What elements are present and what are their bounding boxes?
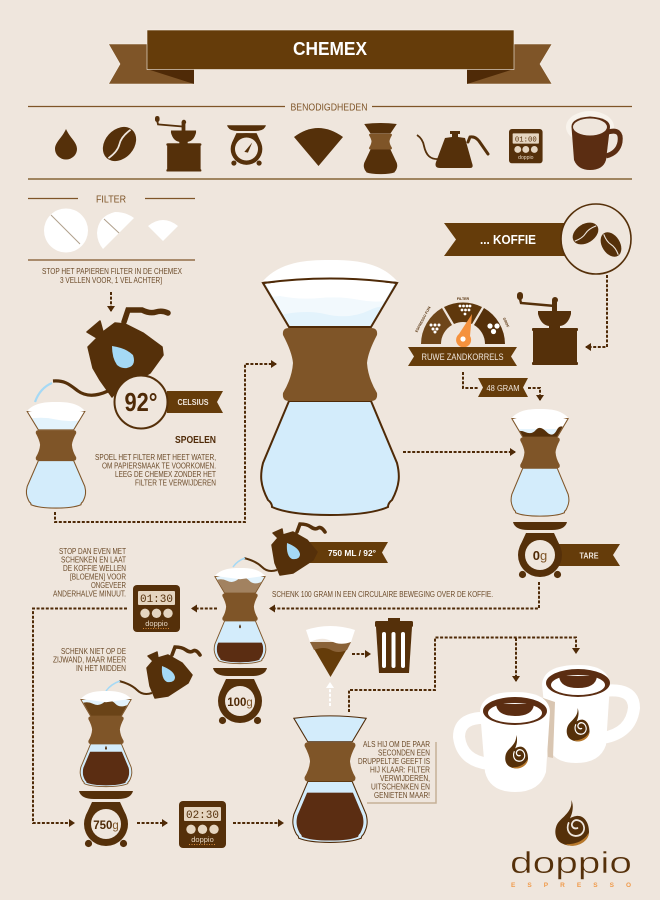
icon: gooseneck kettle [417, 131, 488, 168]
chemex: main [260, 260, 400, 515]
icon: timer 01:30: 01:30 [140, 594, 173, 606]
text: bloom note: STOP DAN EVEN MET [59, 547, 126, 556]
text: finish callout: VERWIJDEREN, [380, 774, 430, 783]
icon: grinder [155, 116, 201, 171]
arrow: gauge to 48 gram [463, 372, 478, 388]
scale: 100g [213, 668, 267, 724]
text: bloom note: [BLOEMEN] VOOR [70, 572, 126, 582]
text: bloom note: ANDERHALVE MINUUT. [53, 590, 126, 598]
arrow: timer 01:30 to scale 750g [33, 608, 127, 823]
badge: 92 celsius: CELSIUS [178, 398, 209, 407]
arrow: filter to kettle [110, 292, 112, 311]
arrow: 48 gram to chemex [528, 388, 540, 400]
text: finish callout: HIJ KLAAR: FILTER [370, 766, 430, 774]
icon: timer: doppio [518, 155, 534, 161]
arrow: chemex to cups [349, 638, 576, 712]
icon: trash bin [375, 618, 413, 673]
chemex: finished [292, 716, 368, 844]
ribbon: 48 gram [478, 378, 528, 397]
icon: water drop [55, 129, 77, 160]
arrow: tare to pouring chemex [270, 582, 539, 608]
text: filter instruction: STOP HET PAPIEREN FILTER IN DE CHEMEX [42, 267, 183, 276]
scale: 750g [79, 791, 133, 847]
text: finish callout: GENIETEN MAAR! [374, 791, 430, 800]
icon: big kettle pouring [35, 310, 168, 402]
arrow: remove filter [329, 686, 331, 706]
icon: left mug [459, 692, 555, 792]
text: pour in the middle [53, 647, 126, 673]
arrow: to timer 01:30 [192, 608, 217, 610]
chemex: with coffee grounds [511, 409, 569, 516]
chemex: rinse [26, 402, 86, 508]
text: finish callout: DRUPPELTJE GEEFT IS [358, 757, 430, 766]
logo: doppio espresso: doppio [510, 845, 632, 880]
ribbon: tare: TARE [580, 550, 599, 560]
icon: mug [566, 111, 620, 170]
scale: tare 0g: 0g [533, 548, 547, 563]
chart: grind gauge: ESPRESSO FIJN [415, 306, 432, 333]
arrowhead: remove filter [326, 682, 334, 688]
title banner: CHEMEX [293, 39, 367, 59]
logo: doppio espresso [510, 800, 632, 889]
chemex: first pour [214, 568, 266, 665]
arrow: timer 02:30 to final chemex [233, 822, 283, 824]
badge: 92 celsius: 92° [124, 387, 158, 417]
text: spoelen: SPOELEN [175, 435, 216, 446]
ribbon: ruwe zandkorrels [408, 347, 517, 366]
title banner [108, 30, 552, 84]
scale: 750g: 750g [93, 820, 119, 832]
icon: grinder [517, 292, 578, 365]
text: circular pour: SCHENK 100 GRAM IN EEN CIRCULAIRE BEWEGING OVER DE KOFFIE. [272, 590, 493, 599]
text: pour in the middle: IN HET MIDDEN [76, 664, 126, 673]
icon: timer [509, 129, 543, 163]
text: spoelen: FILTER TE VERWIJDEREN [135, 478, 216, 488]
icon: timer 01:30 [133, 585, 180, 632]
arrow: to left cup [515, 638, 517, 681]
icon: timer 01:30: doppio [145, 619, 168, 628]
icon: beans circle [561, 204, 631, 274]
equipment row [55, 111, 620, 174]
panel: koffie [408, 204, 631, 400]
arrow: filter to bin [352, 653, 370, 655]
icon: timer 02:30: doppio [191, 835, 214, 844]
icon: right mug [542, 665, 634, 763]
heading: benodigdheden: BENODIGDHEDEN [290, 102, 368, 114]
ribbon: 750 ml [308, 542, 388, 563]
text: pour in the middle: ZIJWAND, MAAR MEER [53, 656, 126, 664]
arrow: beans to grinder [586, 275, 607, 347]
text: filter instruction: 3 VELLEN VOOR, 1 VEL ACHTER] [60, 276, 162, 285]
logo: doppio espresso: ESPRESSO [511, 882, 631, 889]
text: bloom note: DE KOFFIE WELLEN [63, 564, 126, 573]
scale: tare 0g [513, 522, 620, 578]
text: filter instruction [42, 267, 183, 285]
ribbon: koffie: ... KOFFIE [480, 232, 536, 247]
chart: grind gauge [415, 297, 510, 347]
icon: kettle 750 ml [233, 524, 325, 575]
text: spoelen: LEEG DE CHEMEX ZONDER HET [115, 470, 216, 479]
arrow: main chemex to coffee chemex [403, 451, 515, 453]
icon: kitchen scale [227, 125, 266, 166]
icon: timer 02:30 [179, 801, 226, 848]
text: finish callout: ALS HIJ OM DE PAAR [363, 740, 430, 749]
icon: timer 02:30: 02:30 [186, 810, 219, 822]
ribbon: ruwe zandkorrels: RUWE ZANDKORRELS [422, 352, 504, 363]
icon: paper filter cone [294, 128, 343, 166]
chart: grind gauge: GROF [502, 317, 510, 329]
panel: filter [28, 194, 195, 285]
text: spoelen: OM PAPIERSMAAK TE VOORKOMEN. [102, 462, 216, 470]
arrow: rinse to main chemex [55, 364, 276, 522]
icon: chemex silhouette [364, 123, 397, 174]
heading: filter: FILTER [96, 194, 126, 206]
chemex: second pour [80, 691, 132, 788]
text: bloom note [53, 547, 126, 598]
text: spoelen [95, 435, 216, 488]
text: finish callout: SECONDEN EEN [378, 748, 430, 758]
icon: kettle second pour [106, 647, 200, 698]
icon: timer: 01:00 [515, 136, 537, 144]
text: bloom note: ONGEVEER [91, 581, 126, 590]
text: finish callout [358, 740, 436, 803]
scale: 100g: 100g [227, 697, 253, 709]
badge: 92 celsius [114, 376, 223, 428]
icon: coffee bean [96, 120, 143, 168]
icon: used filter [306, 626, 355, 677]
ribbon: 48 gram: 48 GRAM [486, 383, 520, 393]
chart: grind gauge: FILTER [457, 297, 470, 301]
text: finish callout: UITSCHENKEN EN [371, 782, 430, 792]
icon: folded filters [44, 208, 178, 252]
ribbon: 750 ml: 750 ML / 92° [328, 548, 377, 558]
arrow: scale to timer 02:30 [137, 822, 167, 824]
text: spoelen: SPOEL HET FILTER MET HEET WATER, [95, 453, 216, 462]
text: bloom note: SCHENKEN EN LAAT [61, 556, 126, 564]
text: pour in the middle: SCHENK NIET OP DE [61, 647, 126, 656]
ribbon: koffie [444, 223, 570, 256]
